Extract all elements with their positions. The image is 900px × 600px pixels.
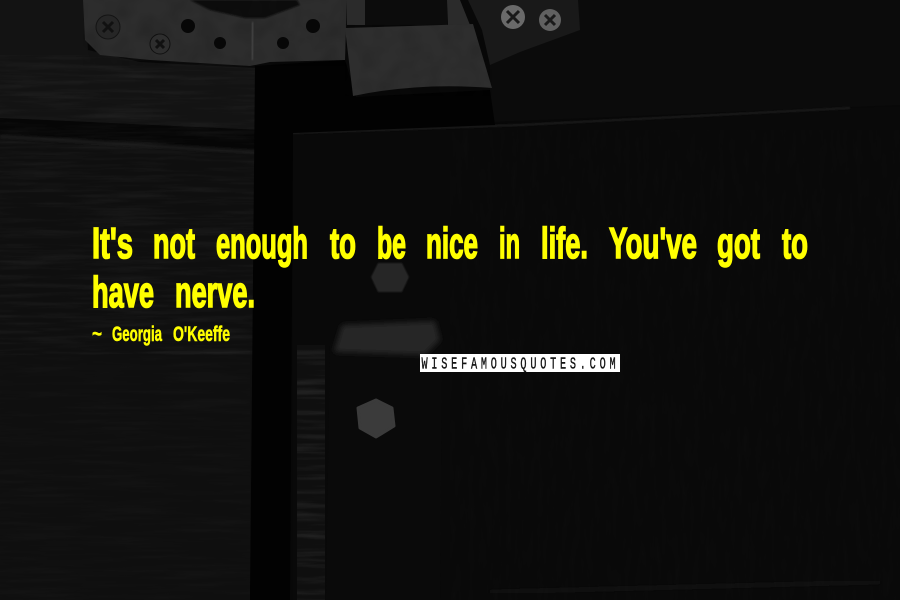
author attribution: Georgia [112,323,162,346]
quote text: have [92,268,154,317]
quote text: in [499,219,520,268]
quote text: It's [92,219,133,268]
quote text: to [330,219,356,268]
padlock [345,0,492,96]
upper bolt [371,263,409,292]
right hinge plate with screws [468,0,580,65]
quote text: nice [426,219,478,268]
quote text: enough [216,219,308,268]
quote text: got [717,219,760,268]
metal strap [297,320,442,600]
quote text: to [782,219,808,268]
author attribution [92,323,230,346]
quote text: You've [609,219,697,268]
quote text [92,219,808,317]
quote text: be [377,219,406,268]
hinge plate [83,0,347,66]
author attribution: O'Keeffe [173,323,230,346]
quote text: nerve. [175,268,255,317]
watermark: wisefamousquotes.com: WISEFAMOUSQUOTES.COM [422,355,619,375]
lower bolt [358,400,394,437]
quote text: life. [541,219,588,268]
author attribution: ~ [92,323,102,346]
quote text: not [153,219,195,268]
